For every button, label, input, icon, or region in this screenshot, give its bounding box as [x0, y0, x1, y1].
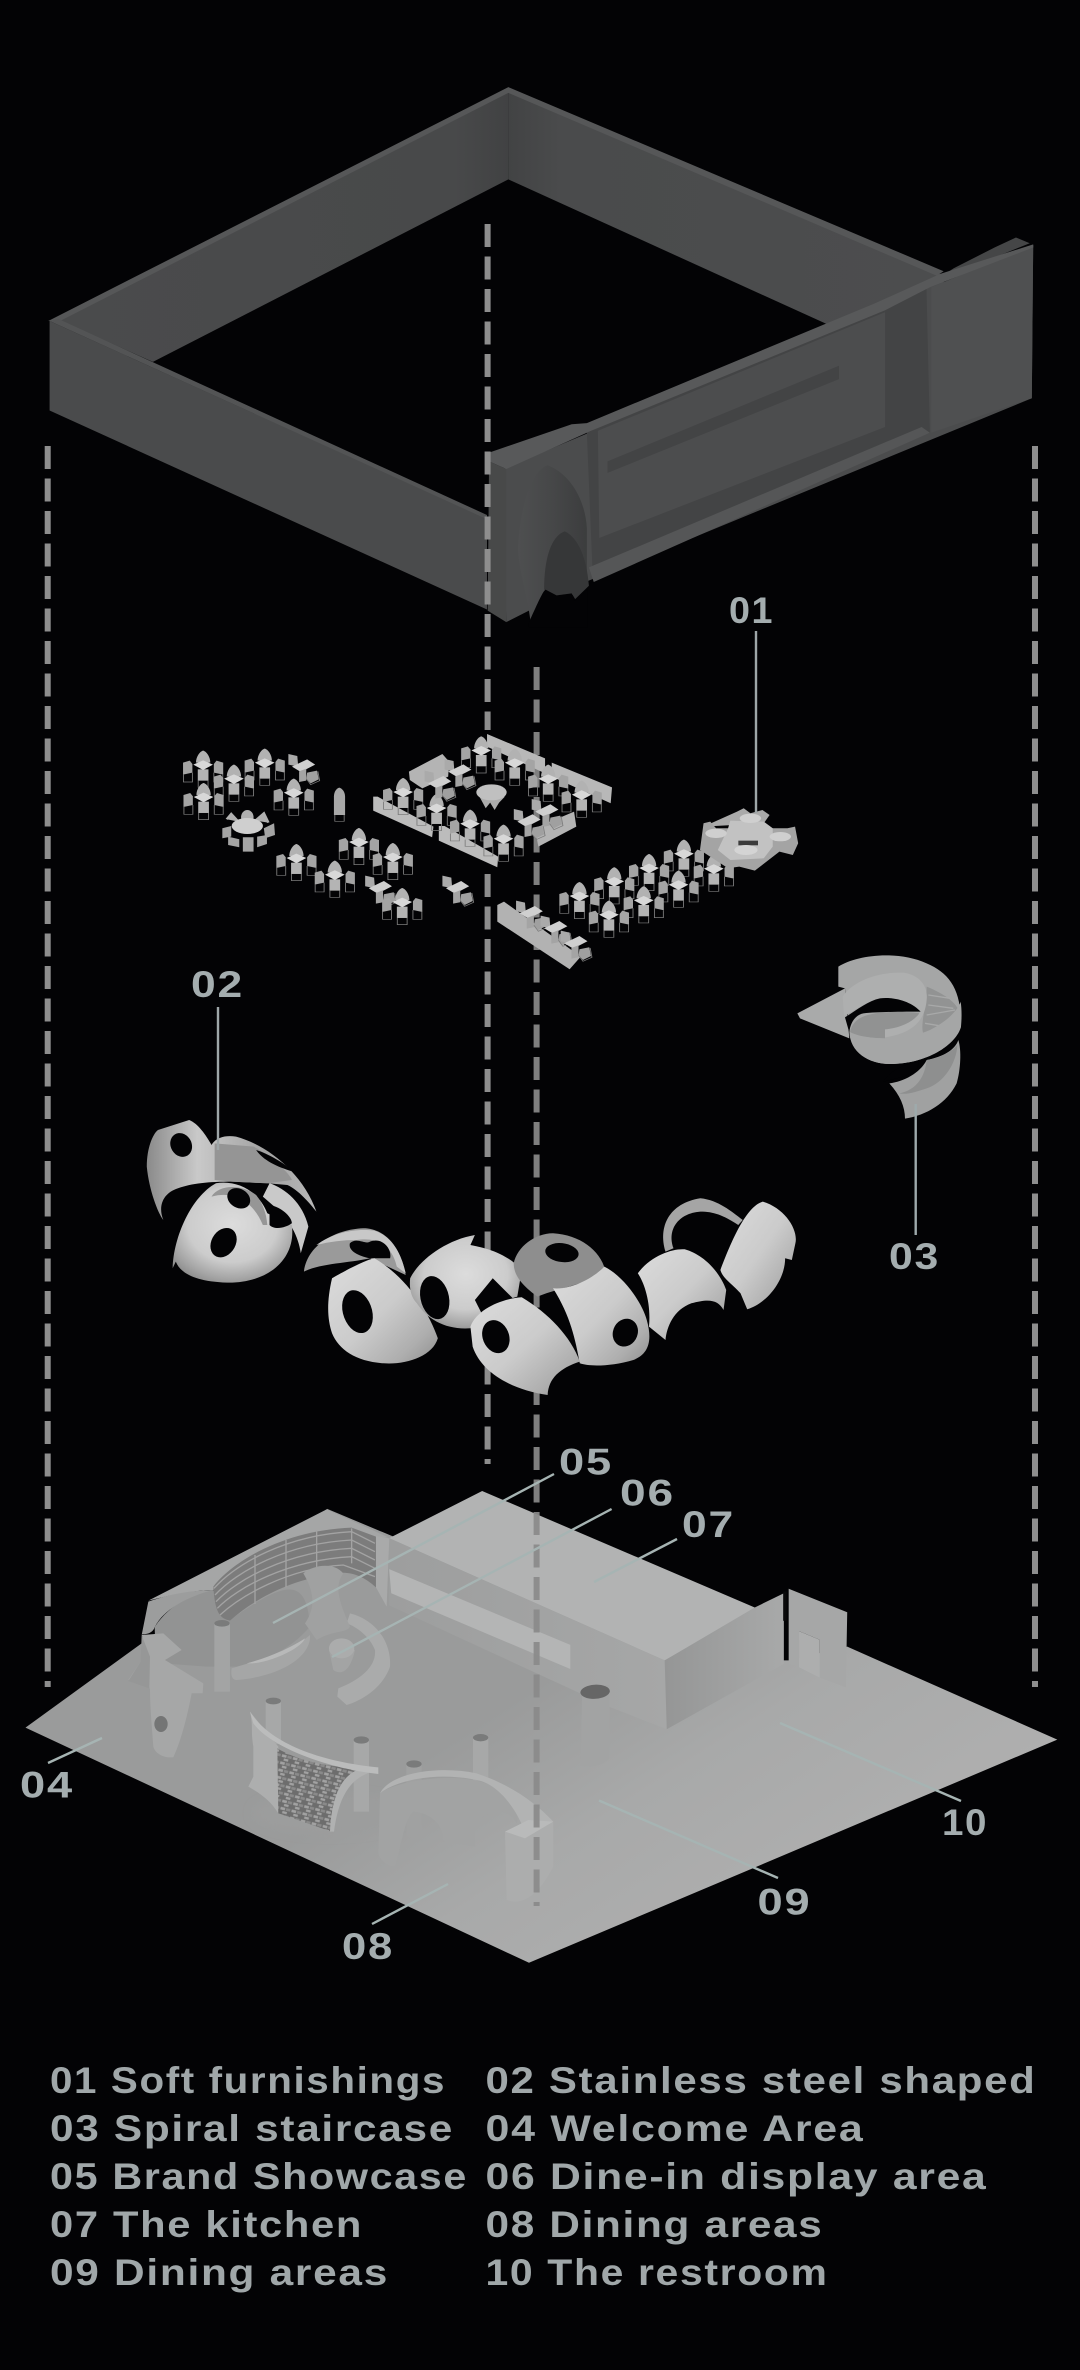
centre guide lower	[485, 874, 491, 1464]
column	[214, 1623, 230, 1692]
wall slit	[783, 1592, 787, 1621]
brick wall	[277, 1748, 362, 1832]
legend item 01: 01 Soft furnishings	[50, 2059, 446, 2101]
column cap	[214, 1620, 230, 1627]
hole	[610, 1317, 640, 1348]
front right wall rim	[489, 244, 1033, 469]
lower flight	[889, 1040, 960, 1119]
dark shell	[514, 1233, 605, 1297]
legend item 02: 02 Stainless steel shaped	[486, 2059, 1036, 2101]
central round table	[476, 784, 507, 810]
central furniture ring	[373, 734, 612, 867]
dining area objects	[248, 1698, 553, 1902]
entry column near kitchen	[581, 1685, 610, 1767]
legend	[50, 2059, 1036, 2293]
legend item 03: 03 Spiral staircase	[50, 2107, 454, 2149]
callout: 08	[342, 1884, 448, 1967]
inner wall	[843, 973, 927, 1037]
callout: 06	[332, 1472, 675, 1657]
crescent heart hole	[350, 1241, 390, 1258]
wall return	[330, 1768, 378, 1832]
third inner window	[475, 1278, 513, 1313]
welcome sculpture	[128, 1633, 203, 1757]
arch doorway	[544, 531, 589, 599]
egg hole top	[223, 1185, 254, 1211]
big shell	[328, 1258, 438, 1364]
front shell	[470, 1297, 580, 1395]
callout: 07	[594, 1504, 735, 1582]
third hole	[417, 1275, 453, 1321]
roof fold	[930, 238, 1030, 283]
arch top band	[380, 1770, 553, 1837]
legend item 06: 06 Dine-in display area	[486, 2155, 988, 2197]
callout: 10: 10	[942, 1802, 988, 1843]
hole	[168, 1132, 194, 1158]
wall top band	[250, 1712, 378, 1774]
legend item 08: 08 Dining areas	[486, 2203, 824, 2245]
legend item 09: 09 Dining areas	[50, 2251, 389, 2293]
callout: 08: 08	[342, 1926, 394, 1967]
egg window	[270, 1205, 292, 1228]
dark shell hole	[542, 1240, 582, 1265]
C bench	[337, 1613, 390, 1705]
sculpture hole	[154, 1716, 168, 1732]
post top	[505, 1820, 553, 1838]
arch body	[378, 1778, 517, 1867]
wall end	[376, 1536, 389, 1607]
callout: 07: 07	[682, 1504, 735, 1545]
front band	[849, 1002, 962, 1064]
front hole	[479, 1318, 513, 1355]
arched shell	[638, 1249, 726, 1340]
kitchen box top	[389, 1491, 758, 1660]
floor layer	[25, 1491, 1057, 1963]
left guide	[45, 446, 51, 1687]
landing	[797, 988, 849, 1038]
back wall top	[148, 1509, 388, 1601]
stair gap	[845, 998, 921, 1033]
base ledge	[589, 427, 930, 582]
kitchen left face	[389, 1538, 667, 1729]
callout: 05	[273, 1442, 613, 1623]
callout: 01: 01	[729, 590, 774, 631]
stool top	[329, 1638, 354, 1658]
floor shadow	[253, 1793, 407, 1833]
big hole	[338, 1288, 377, 1335]
column one	[266, 1698, 281, 1744]
callout: 10	[780, 1723, 988, 1843]
callout: 03: 03	[889, 1236, 940, 1277]
dark steel segment	[215, 1143, 292, 1183]
column three	[406, 1760, 422, 1837]
bench curve	[231, 1635, 310, 1680]
back left inner wall	[59, 92, 508, 362]
shelf lines	[214, 1528, 375, 1615]
crescent shell	[304, 1228, 406, 1275]
door opening	[529, 590, 588, 628]
central pod with four tables	[700, 808, 798, 871]
floor shadow	[155, 1590, 310, 1667]
callout: 09	[599, 1800, 812, 1922]
bottom banquette	[497, 901, 592, 969]
crescent highlight	[316, 1230, 406, 1273]
layer: furniture	[183, 734, 798, 969]
outer dashed guide lines	[48, 224, 1035, 1687]
top layer: outer walls	[48, 87, 1033, 628]
lounge area objects	[128, 1509, 390, 1757]
floor plate	[25, 1491, 1057, 1963]
left cluster tables	[183, 749, 474, 925]
curved wall left	[142, 1590, 213, 1635]
panel slot	[608, 366, 839, 473]
round table set	[222, 810, 275, 852]
column four	[473, 1734, 488, 1781]
shell eight	[553, 1267, 649, 1365]
curved shelves	[213, 1528, 376, 1621]
restroom door	[799, 1631, 820, 1678]
upper steps	[922, 987, 959, 1034]
right pier	[931, 245, 1033, 433]
front right wall base	[503, 245, 1033, 622]
legend item 04: 04 Welcome Area	[486, 2107, 864, 2149]
callout: 04: 04	[20, 1764, 74, 1806]
bench top	[247, 1638, 305, 1663]
last shell	[720, 1202, 796, 1309]
front left wall	[50, 321, 487, 610]
callout: 09: 09	[758, 1882, 812, 1922]
callout: 02: 02	[191, 964, 244, 1005]
column top	[575, 1682, 615, 1702]
layer: spiral staircase	[797, 955, 962, 1119]
restroom wall	[789, 1589, 847, 1687]
step lines	[925, 995, 955, 1027]
kitchen right face	[665, 1593, 784, 1729]
centre sculpture	[303, 1566, 350, 1640]
layer: stainless steel shells	[147, 1120, 796, 1395]
inner floor	[850, 1012, 919, 1038]
slit	[256, 1150, 293, 1172]
entry pier side	[488, 461, 506, 622]
back wall	[838, 955, 961, 1064]
shell right flap	[263, 1183, 308, 1253]
right cluster tables	[559, 840, 734, 937]
third shell	[410, 1235, 522, 1328]
arch outer	[518, 465, 587, 620]
curved wall side	[248, 1712, 278, 1813]
kitchen window band	[389, 1569, 570, 1669]
egg inner	[212, 1187, 267, 1225]
lower gap	[883, 1062, 919, 1082]
centre guide over floor and shells	[534, 667, 540, 1906]
sculpture shade	[128, 1635, 150, 1688]
legend item 07: 07 The kitchen	[50, 2203, 363, 2245]
egg shell	[173, 1183, 292, 1283]
legend item 05: 05 Brand Showcase	[50, 2155, 468, 2197]
legend item 10: 10 The restroom	[486, 2251, 828, 2293]
callout: 04	[20, 1738, 102, 1806]
wall panel face	[598, 312, 885, 538]
column two	[354, 1736, 369, 1812]
lower steps	[899, 1045, 957, 1094]
centre guide upper	[485, 224, 491, 730]
right guide	[1032, 446, 1038, 1687]
ring shell	[663, 1198, 743, 1252]
front left wall rim	[50, 319, 487, 519]
recessed panel	[587, 287, 930, 567]
post	[505, 1822, 553, 1902]
callout: 05: 05	[559, 1442, 613, 1482]
egg hole	[206, 1226, 241, 1260]
stool body	[329, 1650, 355, 1672]
wall top rim	[48, 87, 944, 322]
callout: 06: 06	[620, 1472, 675, 1514]
back right inner wall	[508, 92, 944, 326]
shell back left	[147, 1120, 316, 1220]
